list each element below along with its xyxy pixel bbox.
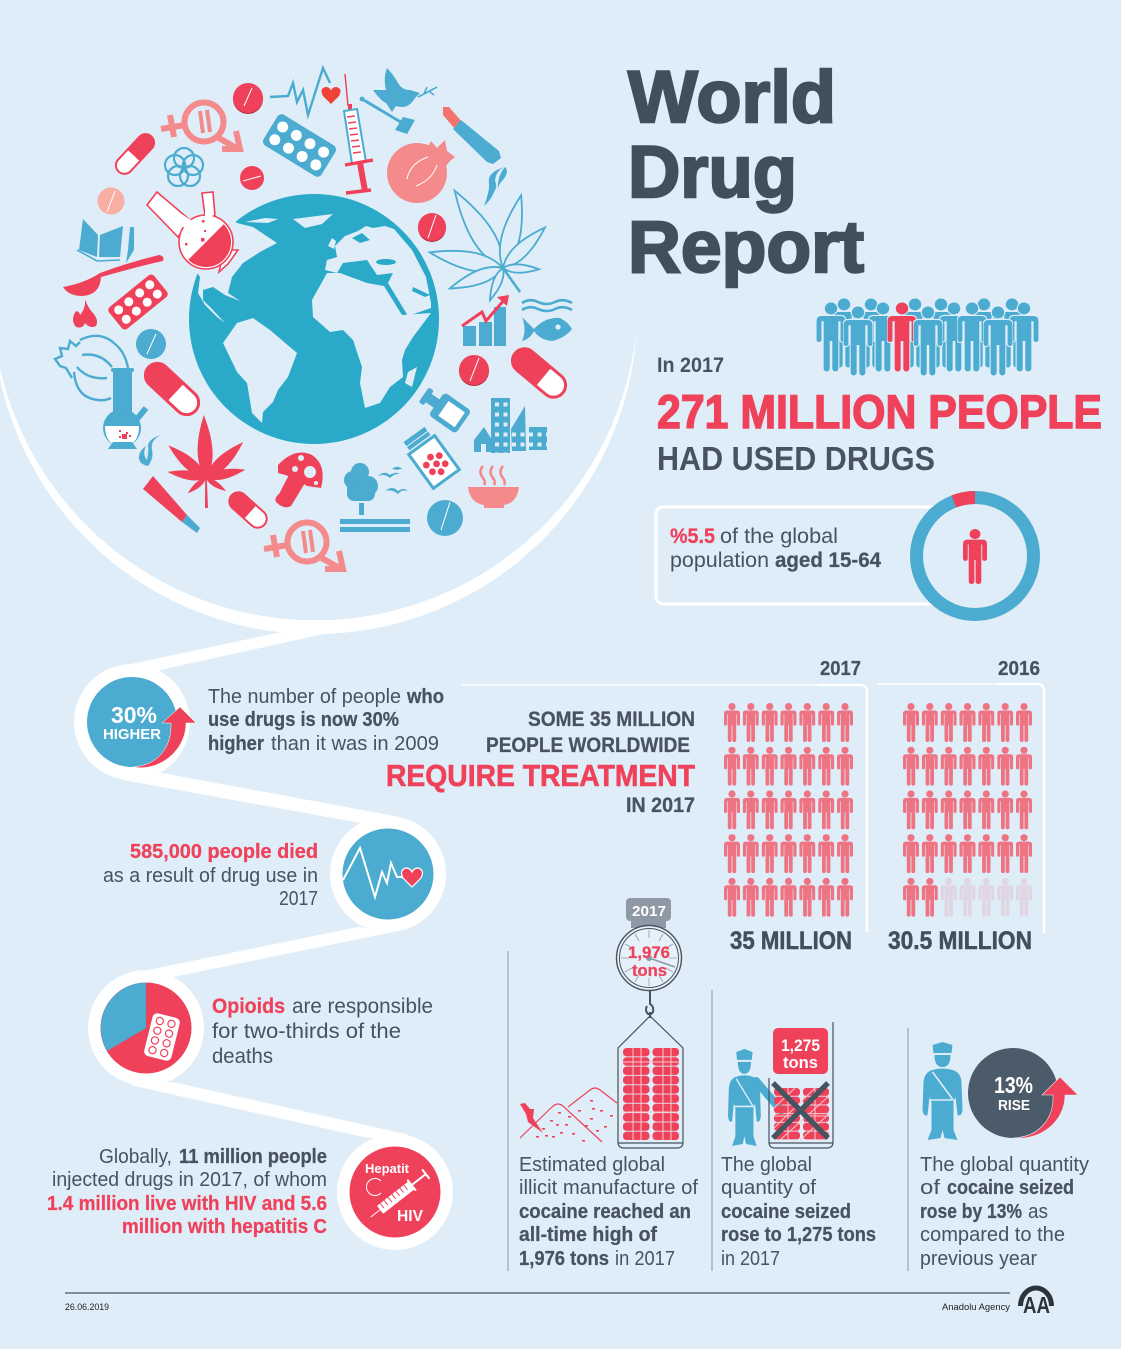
panel: 13% rise (920, 1042, 1089, 1270)
panel: 2016 pictogram (877, 658, 1044, 955)
icon: bong (103, 368, 146, 449)
title: World (628, 57, 836, 138)
icon: gender symbol bottom (264, 522, 343, 569)
icon: red cannabis leaf (165, 415, 247, 508)
icon: scale with bricks: 2017 (632, 903, 666, 920)
pictogram: 30.5 million (903, 703, 1032, 917)
icon: mushroom (275, 453, 323, 507)
pictogram: 35 million (724, 703, 853, 917)
text: injected drugs: 11 million people (179, 1146, 327, 1168)
icon: fish and waves (522, 300, 572, 341)
intro: people icons (816, 298, 1039, 376)
circle: opioids pie chart (100, 982, 192, 1074)
icon: capsule right (508, 344, 570, 402)
circle: 13% rise: RISE (998, 1097, 1030, 1114)
text: opioids: are responsible (292, 995, 433, 1018)
icon: small capsule (226, 489, 270, 531)
icon: lipstick (443, 107, 501, 164)
text: rise: previous year (920, 1248, 1037, 1270)
icon: scale with bricks: 1,976 (628, 943, 670, 962)
circle: 30% higher (87, 677, 196, 768)
circle: 13% rise: 13% (994, 1072, 1033, 1098)
text: rise: The global quantity (920, 1154, 1089, 1176)
icon: joint (143, 476, 200, 533)
text: 585,000 deaths (103, 841, 318, 910)
icon: red tablet (233, 83, 263, 114)
text: seized: rose to 1,275 tons (721, 1224, 876, 1246)
title: Report (628, 207, 864, 288)
text: manufacture (519, 1154, 698, 1270)
icon: large capsule (140, 358, 204, 420)
text: opioids: for two-thirds of the (212, 1020, 401, 1043)
text: manufacture: illicit manufacture of (519, 1177, 698, 1199)
icon: flower of circles (165, 148, 203, 186)
text: require treatment (386, 708, 695, 817)
icon: smoke right (484, 167, 507, 206)
icon: blue tablet large (427, 500, 463, 536)
text: 585,000 deaths: 585,000 people died (130, 841, 318, 863)
label: 2017: 2017 (820, 658, 861, 680)
text: seized: in 2017 (721, 1248, 780, 1270)
text: rise (920, 1154, 1089, 1270)
text: manufacture: in 2017 (615, 1248, 675, 1270)
text: require treatment: SOME 35 MILLION (528, 708, 695, 731)
icon: blue bottle (416, 383, 472, 434)
text: in 2017: In 2017 (657, 354, 724, 377)
circle: 13% rise (968, 1048, 1078, 1138)
icon: officer with seized bricks: tons (783, 1053, 818, 1072)
icon: person (963, 529, 987, 584)
subhead: had used drugs: HAD USED DRUGS (657, 440, 935, 477)
text: injected drugs: million with hepatitis C (122, 1216, 327, 1238)
text: injected drugs: injected drugs in 2017, of whom (52, 1169, 327, 1191)
panel: global population share (656, 498, 1034, 614)
text: rise: as (1028, 1201, 1048, 1223)
text: seized: The global (721, 1154, 812, 1176)
icon: red blister pack (107, 273, 169, 331)
agency name: Anadolu Agency (942, 1302, 1010, 1313)
icon: scale with bricks: tons (632, 961, 667, 980)
text: opioids: deaths (212, 1045, 273, 1068)
dividers (508, 951, 908, 1271)
text: 30 percent higher: The number of people (208, 686, 401, 708)
icon: coca powder mounds (520, 1088, 617, 1142)
circle: hepatitis and HIV: Hepatit (365, 1161, 410, 1176)
text: manufacture: 1,976 tons (519, 1248, 609, 1270)
icon: small red tablet (240, 166, 264, 190)
white ribbon path (0, 330, 636, 1250)
icon: officer with seized bricks: 1,275 (781, 1036, 820, 1055)
text: 30 percent higher: than it was in 2009 (271, 733, 439, 755)
icon: smoke left (139, 435, 161, 466)
circle: 30% higher: 30% (111, 702, 157, 728)
text: 5.5 percent: aged 15-64 (775, 549, 881, 572)
date: 26.06.2019 (65, 1302, 109, 1312)
text: 5.5 percent: %5.5 (670, 525, 715, 548)
panel: cocaine manufacture (519, 898, 698, 1270)
text: seized: cocaine seized (721, 1201, 851, 1223)
donut chart (916, 498, 1034, 614)
text: opioids: Opioids (212, 995, 285, 1018)
text: require treatment: IN 2017 (626, 794, 695, 817)
label: 2016: 2016 (998, 658, 1040, 680)
text: injected drugs: 1.4 million live with HIV and 5.6 (47, 1193, 327, 1215)
icon: poppy outline (55, 336, 128, 400)
text: injected drugs (47, 1146, 327, 1238)
value: 35 million: 35 MILLION (730, 927, 852, 955)
text: rise: of (920, 1177, 941, 1199)
text: injected drugs: Globally, (99, 1146, 172, 1168)
text: 5.5 percent (670, 525, 881, 572)
circle: 30% higher: HIGHER (103, 726, 161, 743)
icon: heartbeat and heart (270, 68, 340, 115)
icon: salmon tablet (98, 188, 124, 214)
icon: steaming bowl (468, 466, 519, 508)
icon: pill jar (401, 425, 459, 488)
text: 5.5 percent: of the global (720, 525, 838, 548)
icon: syringe (344, 74, 373, 193)
title: Drug (628, 132, 797, 213)
footer (65, 1288, 1052, 1318)
icon: scale with bricks (616, 898, 683, 1148)
icon: officer with seized bricks (728, 1022, 833, 1148)
text: manufacture: Estimated global (519, 1154, 665, 1176)
icon: top capsule (112, 131, 158, 177)
text: rise: compared to the (920, 1224, 1065, 1246)
globe (175, 194, 439, 444)
icon: blue cannabis leaf (428, 185, 550, 302)
text: 30 percent higher: higher (208, 733, 264, 755)
panel: cocaine seized (721, 1022, 876, 1270)
icon: buildings (474, 398, 547, 453)
icon: blue tablet (136, 329, 166, 359)
icon: red tablet near leaf (418, 213, 446, 242)
icon: growth chart (462, 295, 509, 346)
icon: open book and pencil (77, 219, 134, 263)
text: opioids (212, 995, 433, 1068)
panel: 2017 pictogram (462, 658, 867, 955)
text: seized: quantity of (721, 1177, 816, 1199)
logo: AA (1023, 1292, 1050, 1318)
text: 30 percent higher (208, 686, 444, 755)
text: 5.5 percent: population (670, 549, 769, 572)
icon: pomegranate (387, 140, 455, 203)
icon: blue blister pack (261, 112, 338, 179)
circle: hepatitis and HIV: HIV (397, 1208, 423, 1225)
title (628, 57, 864, 288)
icon: flame (73, 299, 97, 328)
text: rise: cocaine seized (947, 1177, 1074, 1199)
text: 585,000 deaths: as a result of drug use in (103, 865, 318, 887)
circle: hepatitis and HIV (350, 1146, 440, 1238)
value: 30.5 million: 30.5 MILLION (888, 927, 1032, 955)
text: 30 percent higher: use drugs is now 30% (208, 709, 399, 731)
text: seized (721, 1154, 876, 1270)
text: require treatment: REQUIRE TREATMENT (386, 758, 695, 793)
text: require treatment: PEOPLE WORLDWIDE (486, 734, 690, 757)
text: 30 percent higher: who (406, 686, 444, 708)
text: 585,000 deaths: 2017 (279, 888, 318, 910)
icon: gender symbol top (161, 102, 240, 149)
icon: tree, birds and ground (340, 463, 410, 532)
icon: spoon (63, 255, 164, 296)
circle: heartbeat (342, 828, 434, 920)
icon: officer (922, 1042, 962, 1140)
text: manufacture: cocaine reached an (519, 1201, 691, 1223)
icon: flask (147, 192, 238, 272)
text: rise: rose by 13% (920, 1201, 1022, 1223)
text: manufacture: all-time high of (519, 1224, 657, 1246)
icon: red tablet right (459, 355, 489, 386)
icon: dove and gavel (360, 68, 437, 134)
